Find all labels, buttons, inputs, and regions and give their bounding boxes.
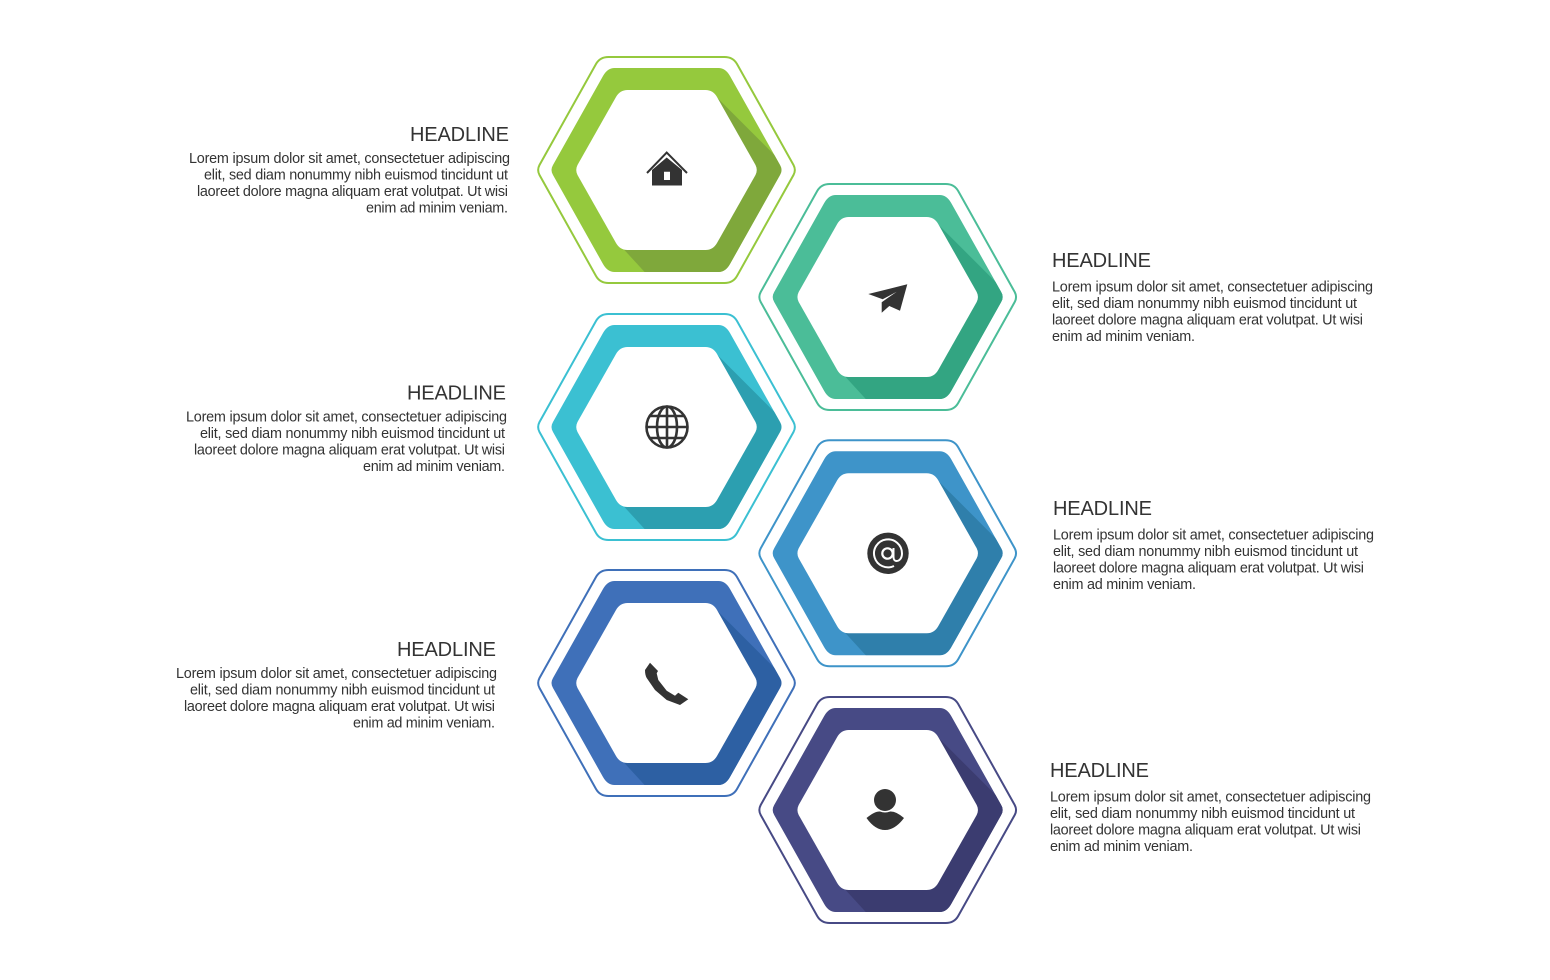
- text block 2: HEADLINE: [1052, 250, 1151, 272]
- text block 4: elit, sed diam nonummy nibh euismod tincidunt ut: [1053, 544, 1358, 560]
- text block 1: Lorem ipsum dolor sit amet, consectetuer adipiscing: [189, 151, 510, 167]
- text block 6: laoreet dolore magna aliquam erat volutpat. Ut wisi: [1050, 822, 1361, 838]
- hexagon 2: teal: [759, 184, 1016, 422]
- text block 4: Lorem ipsum dolor sit amet, consectetuer adipiscing: [1053, 528, 1374, 544]
- text block 4: enim ad minim veniam.: [1053, 577, 1196, 593]
- icon: phone: [645, 663, 688, 705]
- text block 5: [176, 639, 497, 732]
- text block 2: [1052, 250, 1373, 345]
- text block 3: laoreet dolore magna aliquam erat volutpat. Ut wisi: [194, 442, 505, 458]
- text block 6: enim ad minim veniam.: [1050, 839, 1193, 855]
- text block 1: elit, sed diam nonummy nibh euismod tincidunt ut: [204, 168, 508, 184]
- text block 6: elit, sed diam nonummy nibh euismod tincidunt ut: [1050, 806, 1355, 822]
- text block 2: enim ad minim veniam.: [1052, 329, 1195, 345]
- icon: at sign: [867, 533, 909, 574]
- hexagon 3: cyan: [538, 314, 795, 552]
- text block 1: laoreet dolore magna aliquam erat volutpat. Ut wisi: [197, 184, 508, 200]
- hexagon 4: light blue: [759, 440, 1016, 678]
- text block 3: enim ad minim veniam.: [363, 459, 505, 475]
- text block 6: [1050, 760, 1371, 855]
- icon: globe: [646, 406, 688, 448]
- text block 4: [1053, 498, 1374, 593]
- text block 1: HEADLINE: [410, 124, 509, 146]
- text block 6: Lorem ipsum dolor sit amet, consectetuer adipiscing: [1050, 790, 1371, 806]
- text block 3: [186, 382, 507, 475]
- text block 1: [189, 124, 510, 216]
- icon: person: [866, 789, 904, 830]
- text block 1: enim ad minim veniam.: [366, 200, 508, 216]
- text block 5: laoreet dolore magna aliquam erat volutpat. Ut wisi: [184, 699, 495, 715]
- icon: paper plane: [868, 284, 907, 313]
- text block 2: laoreet dolore magna aliquam erat volutpat. Ut wisi: [1052, 312, 1363, 328]
- text block 4: HEADLINE: [1053, 498, 1152, 520]
- icon: house: [647, 152, 687, 186]
- text block 3: Lorem ipsum dolor sit amet, consectetuer adipiscing: [186, 410, 507, 426]
- text block 5: elit, sed diam nonummy nibh euismod tincidunt ut: [190, 682, 495, 698]
- text block 5: HEADLINE: [397, 639, 496, 661]
- text block 5: Lorem ipsum dolor sit amet, consectetuer adipiscing: [176, 666, 497, 682]
- text block 2: Lorem ipsum dolor sit amet, consectetuer adipiscing: [1052, 280, 1373, 296]
- hexagon 6: navy: [759, 697, 1016, 935]
- text block 3: elit, sed diam nonummy nibh euismod tincidunt ut: [200, 426, 505, 442]
- text block 6: HEADLINE: [1050, 760, 1149, 782]
- text block 2: elit, sed diam nonummy nibh euismod tincidunt ut: [1052, 296, 1357, 312]
- text block 5: enim ad minim veniam.: [353, 716, 495, 732]
- text block 4: laoreet dolore magna aliquam erat volutpat. Ut wisi: [1053, 560, 1364, 576]
- hexagon 5: royal blue: [538, 570, 795, 808]
- text block 3: HEADLINE: [407, 382, 506, 404]
- hexagon 1: green: [538, 57, 795, 295]
